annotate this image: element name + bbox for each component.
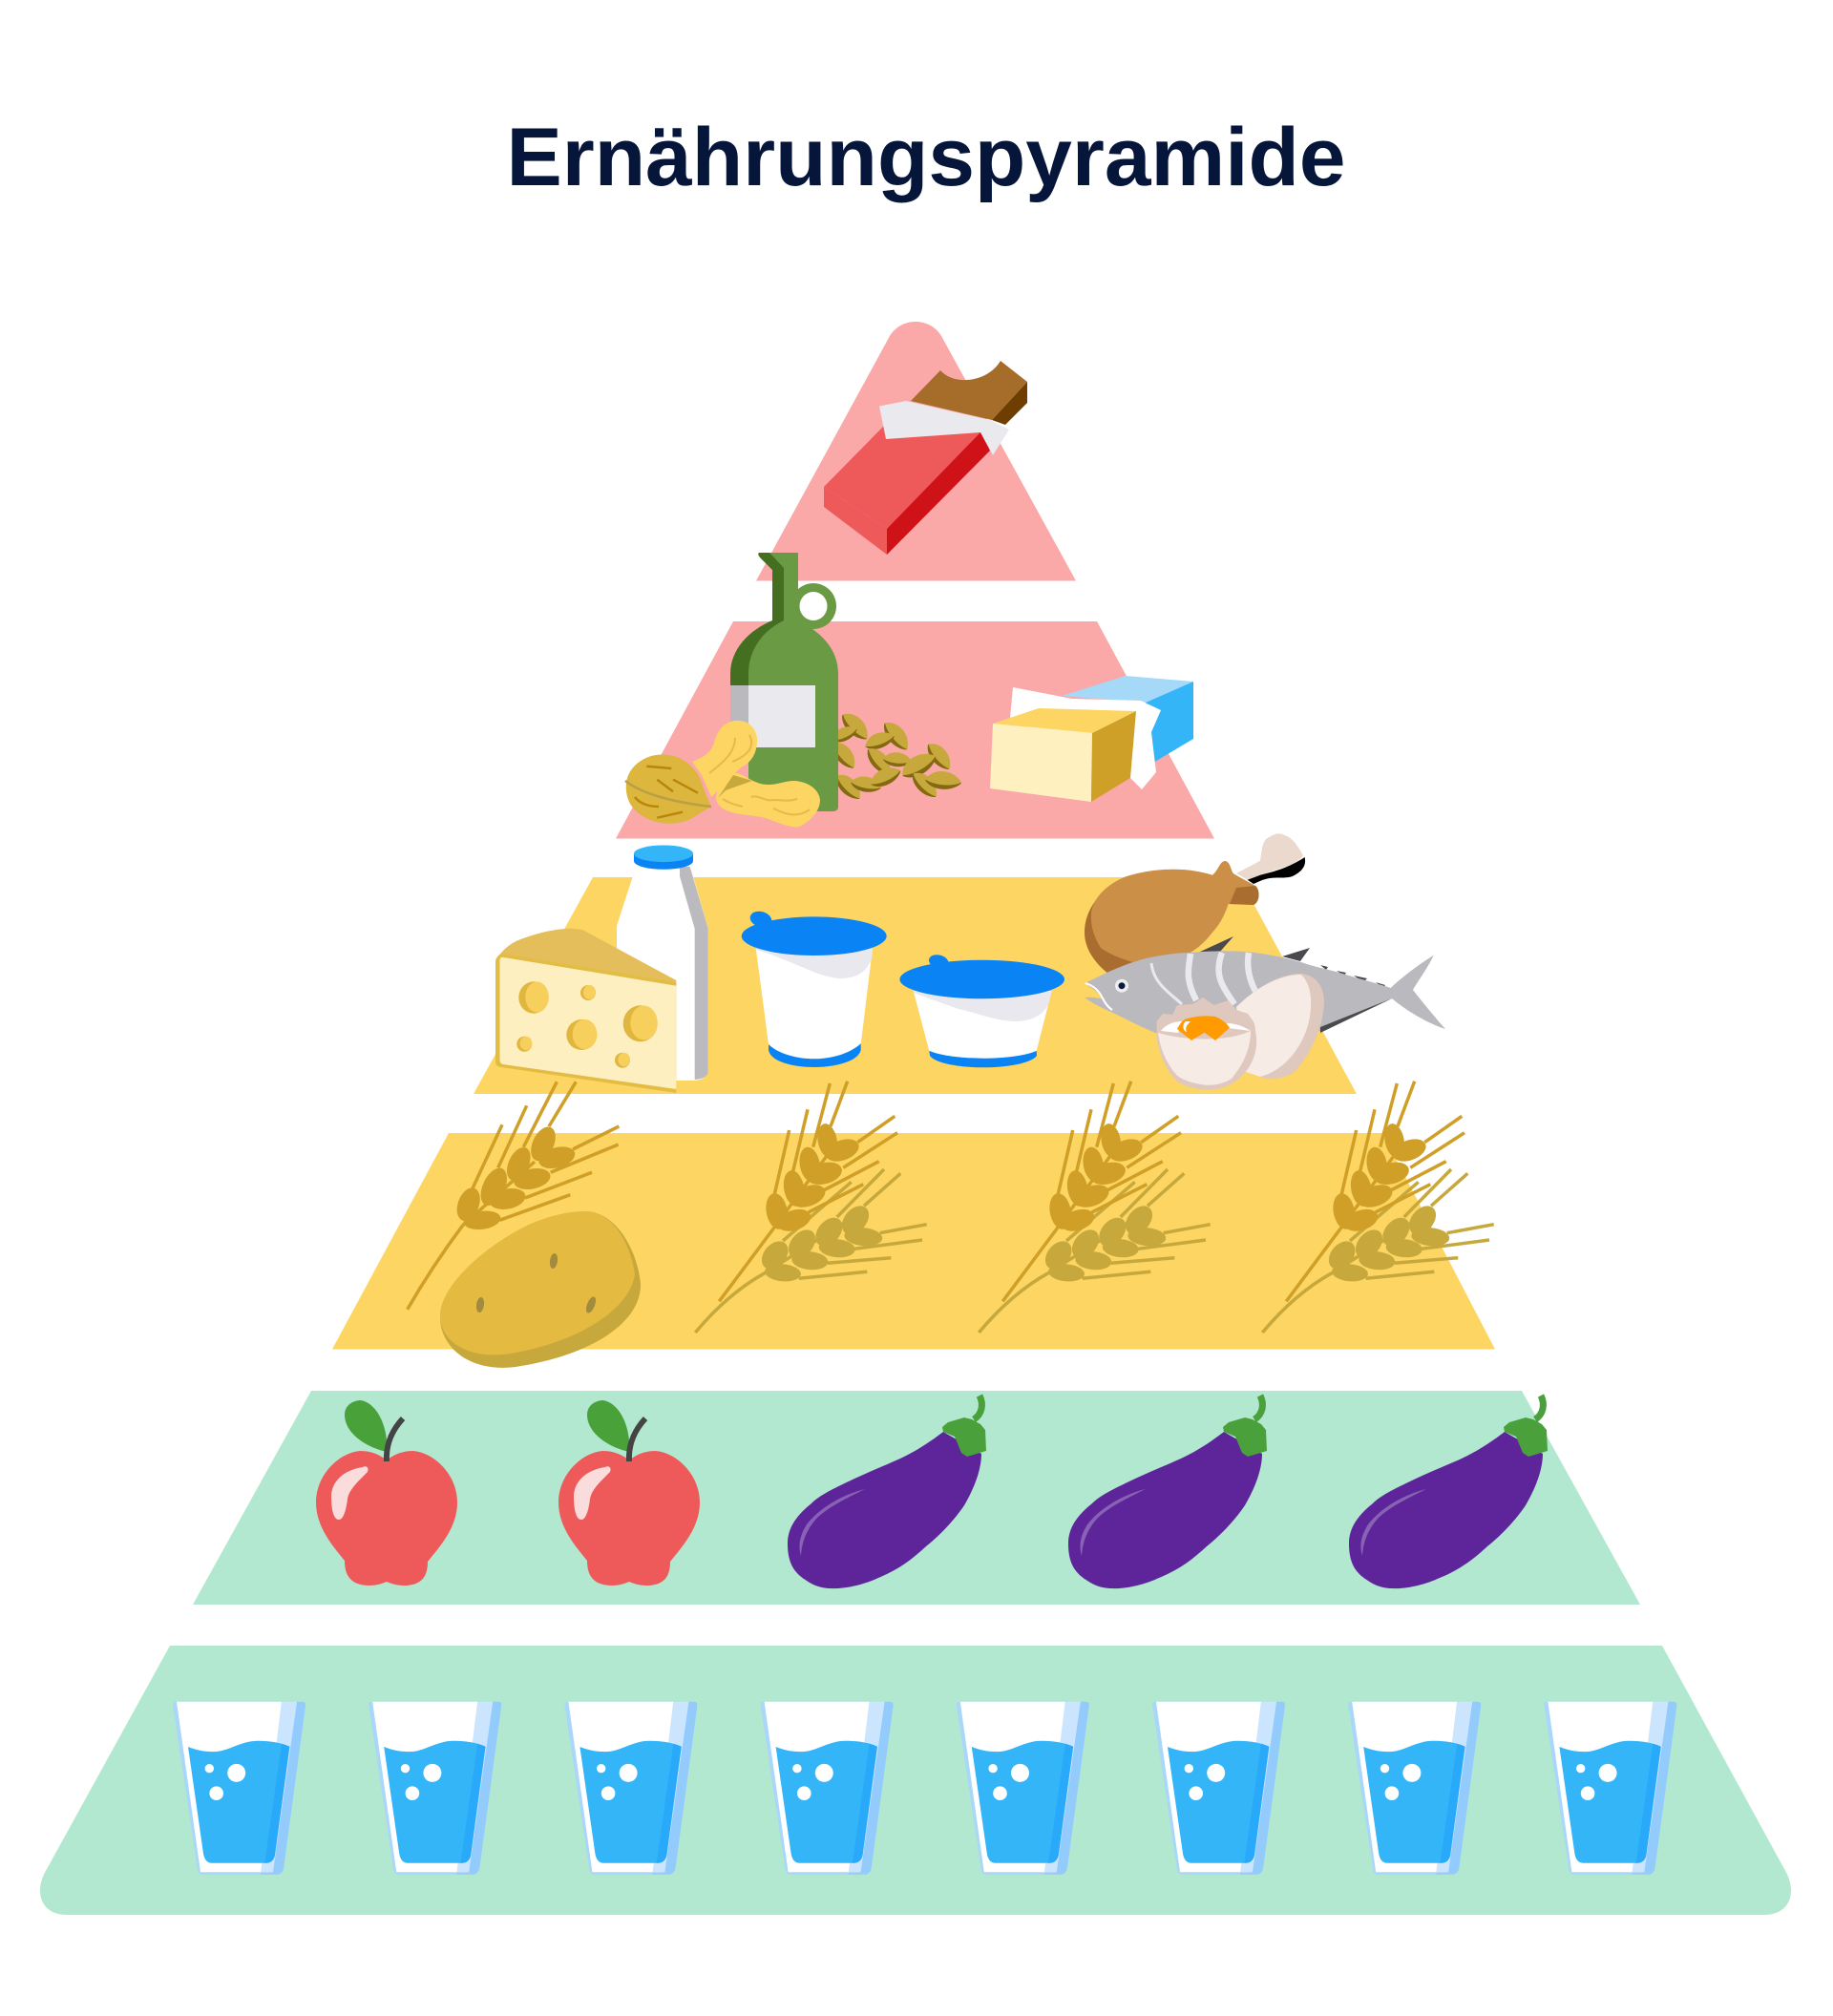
icon: whole egg <box>1236 974 1324 1079</box>
icon: water glass 5 <box>957 1702 1089 1875</box>
icon: butter <box>990 676 1193 802</box>
icon: water glass 6 <box>1152 1702 1285 1875</box>
pyramid level: water <box>40 1646 1791 1915</box>
icon: wheat 2 <box>695 1082 927 1333</box>
icon: oil bottle <box>730 553 838 811</box>
icon: apple 1 <box>316 1400 457 1586</box>
icon: water glass 7 <box>1348 1702 1481 1875</box>
icon: eggplant 3 <box>1349 1396 1548 1588</box>
icon: eggplant 1 <box>788 1396 986 1588</box>
icon: walnut <box>625 754 711 824</box>
icon: chicken leg <box>1085 833 1305 975</box>
title: Ernährungspyramide <box>506 112 1346 203</box>
icon: water glass 4 <box>761 1702 894 1875</box>
icon: short yogurt cup <box>899 953 1064 1067</box>
icon: potato <box>440 1211 641 1368</box>
pyramid level: sweets tip <box>756 322 1076 580</box>
icon: tall yogurt cup <box>742 909 887 1067</box>
icon: chocolate bar <box>824 361 1027 555</box>
icon: fish <box>1085 936 1445 1034</box>
icon: milk bottle <box>617 846 708 1081</box>
icon: eggplant 2 <box>1068 1396 1267 1588</box>
icon: wheat 1 <box>408 1082 619 1310</box>
icon: water glass 1 <box>173 1702 306 1875</box>
icon: seeds <box>828 708 962 804</box>
pyramid level: grains <box>332 1133 1495 1350</box>
icon: cheese <box>495 929 676 1093</box>
icon: cracked egg <box>1157 998 1256 1090</box>
icon: wheat 3 <box>979 1082 1211 1333</box>
icon: apple 2 <box>558 1400 700 1586</box>
icon: water glass 3 <box>564 1702 697 1875</box>
pyramid level: fats and oils <box>616 621 1214 838</box>
icon: wheat 4 <box>1262 1082 1494 1333</box>
pyramid level: dairy and protein <box>474 877 1357 1094</box>
icon: peanuts <box>692 721 820 828</box>
pyramid level: fruit and vegetables <box>193 1391 1640 1605</box>
icon: water glass 2 <box>369 1702 501 1875</box>
icon: water glass 8 <box>1544 1702 1676 1875</box>
